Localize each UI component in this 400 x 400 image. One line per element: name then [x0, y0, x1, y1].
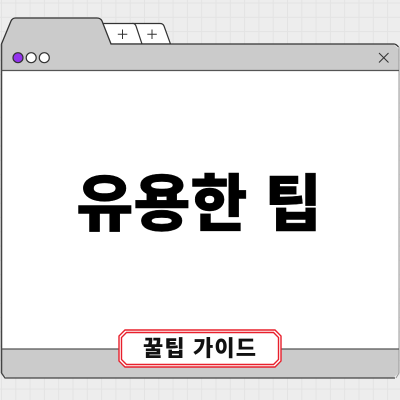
browser tab: first plus tab [102, 24, 142, 44]
window control: purple dot [13, 53, 23, 63]
window control: white dot [39, 53, 49, 63]
browser tab: second plus tab [133, 24, 170, 44]
window control: white dot [26, 53, 36, 63]
icon: close [379, 53, 388, 62]
title: 유용한 팁 [76, 170, 322, 240]
badge text: 꿀팁 가이드 [143, 336, 256, 361]
badge: guide label [119, 330, 281, 367]
window content area [2, 70, 398, 349]
